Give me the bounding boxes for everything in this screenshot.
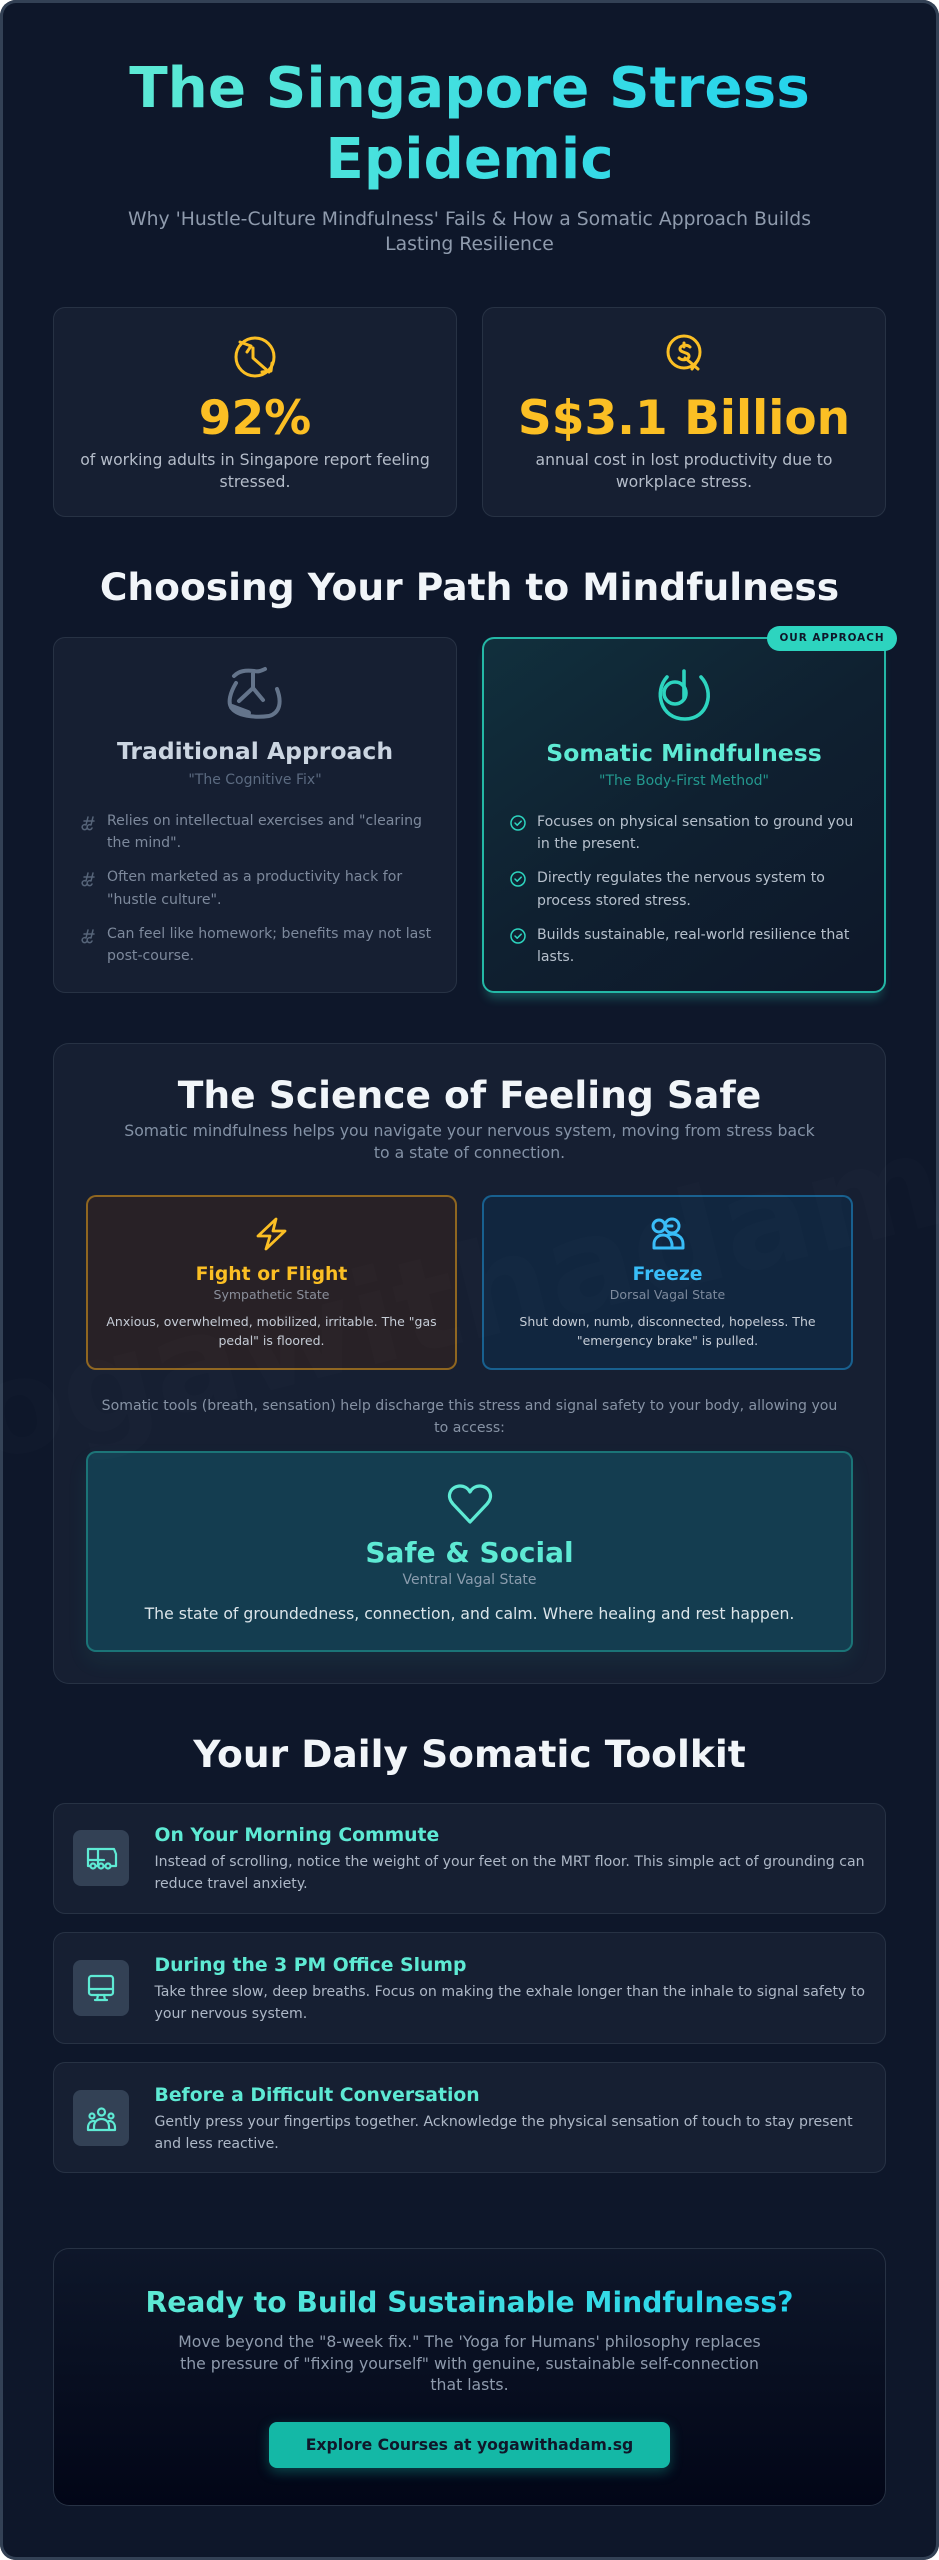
icon: train <box>73 1830 129 1886</box>
tagline: "The Body-First Method" <box>599 773 769 789</box>
stat description: annual cost in lost productivity due to <box>536 450 832 469</box>
list item: Often marketed as a productivity hack for <box>107 869 402 885</box>
transition text <box>102 1398 837 1436</box>
subtitle <box>128 209 811 255</box>
icon: lightning bolt <box>256 1218 286 1250</box>
panel: stat cost <box>482 307 886 517</box>
list item: "hustle culture". <box>107 892 221 908</box>
state description: pedal" is floored. <box>218 1332 324 1348</box>
stat description <box>536 450 832 491</box>
panel: morning commute <box>53 1802 886 1914</box>
list item <box>537 927 850 965</box>
card: safe and social <box>86 1451 853 1652</box>
stat description: stressed. <box>220 472 290 491</box>
title: The Singapore Stress <box>129 56 810 121</box>
list item <box>107 813 422 851</box>
panel: somatic mindfulness <box>482 637 886 993</box>
list item: post-course. <box>107 948 194 964</box>
body text: the pressure of "fixing yourself" with genuine, sustainable self-connection <box>180 2354 759 2373</box>
state name: Fight or Flight <box>196 1264 347 1284</box>
subtitle: Lasting Resilience <box>385 234 554 255</box>
panel: the science of feeling safe <box>53 1043 886 1684</box>
button <box>269 2422 670 2468</box>
list item: Can feel like homework; benefits may not last <box>107 926 431 942</box>
list item <box>107 926 431 964</box>
state type: Ventral Vagal State <box>402 1572 537 1588</box>
body text <box>178 2332 761 2394</box>
state name: Safe & Social <box>365 1536 574 1569</box>
transition text: to access: <box>434 1420 505 1436</box>
list: drawbacks <box>81 813 431 964</box>
state description: "emergency brake" is pulled. <box>577 1332 758 1348</box>
check icon <box>510 871 526 887</box>
list item <box>107 869 402 908</box>
icon: people <box>652 1218 684 1250</box>
badge: our approach <box>767 626 897 651</box>
check icon <box>510 928 526 944</box>
tip text: reduce travel anxiety. <box>154 1876 308 1892</box>
tip text: Instead of scrolling, notice the weight of your feet on the MRT floor. This simple act of grounding can <box>154 1854 865 1870</box>
subtitle: Why 'Hustle-Culture Mindfulness' Fails & How a Somatic Approach Builds <box>128 209 811 230</box>
state type: Dorsal Vagal State <box>610 1287 725 1302</box>
tagline: "The Cognitive Fix" <box>188 772 322 788</box>
tip text <box>154 1984 865 2022</box>
icon: centred figure <box>658 669 710 721</box>
list item: lasts. <box>537 949 574 965</box>
icon: heart <box>448 1484 492 1524</box>
stat description <box>80 450 430 491</box>
intro text: Somatic mindfulness helps you navigate your nervous system, moving from stress back <box>124 1121 815 1140</box>
stat number: S$3.1 Billion <box>518 391 850 446</box>
tip text: Gently press your fingertips together. Acknowledge the physical sensation of touch to stay present <box>154 2114 853 2130</box>
icon: meditating figure <box>228 666 282 719</box>
tip title: During the 3 PM Office Slump <box>154 1954 466 1976</box>
state name: Freeze <box>632 1264 703 1284</box>
list item: process stored stress. <box>537 893 691 909</box>
stat number: 92% <box>199 391 311 446</box>
tip text <box>154 2114 853 2152</box>
panel: call to action <box>53 2248 886 2506</box>
button: Explore Courses at yogawithadam.sg <box>306 2435 633 2454</box>
tip title: On Your Morning Commute <box>154 1825 439 1846</box>
icon: group <box>73 2090 129 2146</box>
title: Epidemic <box>325 127 614 192</box>
stat description: workplace stress. <box>616 472 752 491</box>
bullet icon <box>81 929 95 944</box>
bullet icon <box>81 872 95 886</box>
heading: choosing your path: Choosing Your Path to Mindfulness <box>100 565 839 609</box>
check icon <box>510 815 526 831</box>
state type: Sympathetic State <box>214 1287 329 1302</box>
title <box>119 53 820 195</box>
heading: daily toolkit: Your Daily Somatic Toolkit <box>193 1732 746 1776</box>
panel: office slump <box>53 1932 886 2044</box>
icon: stressed clock <box>234 336 276 378</box>
icon: monitor <box>73 1960 129 2016</box>
icon: dollar target <box>666 334 702 371</box>
badge: our approach: OUR APPROACH <box>779 632 885 644</box>
heading: Traditional Approach <box>117 737 393 765</box>
heading: Ready to Build Sustainable Mindfulness? <box>146 2286 793 2319</box>
panel: stat 92% <box>53 307 457 517</box>
list item: in the present. <box>537 836 640 852</box>
tip text: your nervous system. <box>154 2006 307 2022</box>
list: benefits <box>510 814 853 965</box>
list item <box>537 870 825 909</box>
intro text: to a state of connection. <box>374 1143 565 1162</box>
stat description: of working adults in Singapore report feeling <box>80 450 430 469</box>
list item: Directly regulates the nervous system to <box>537 870 825 886</box>
heading: Somatic Mindfulness <box>546 739 822 767</box>
state description: Anxious, overwhelmed, mobilized, irritable. The "gas <box>106 1314 437 1328</box>
tip text: and less reactive. <box>154 2136 279 2152</box>
heading: The Science of Feeling Safe <box>178 1073 761 1117</box>
state description: Shut down, numb, disconnected, hopeless. The <box>519 1314 816 1328</box>
transition text: Somatic tools (breath, sensation) help discharge this stress and signal safety to your body, allowing you <box>102 1398 837 1414</box>
list item: Builds sustainable, real-world resilience that <box>537 927 849 943</box>
panel: difficult conversation <box>53 2062 886 2173</box>
list item: Relies on intellectual exercises and "clearing <box>107 813 422 829</box>
body text: that lasts. <box>430 2375 509 2394</box>
state description <box>106 1314 437 1348</box>
state description <box>519 1314 816 1348</box>
card: fight or flight <box>86 1195 457 1370</box>
list item: the mind". <box>107 835 181 851</box>
tip text <box>154 1854 865 1892</box>
card: freeze <box>482 1195 853 1370</box>
bullet icon <box>81 816 95 830</box>
body text: Move beyond the "8-week fix." The 'Yoga for Humans' philosophy replaces <box>178 2332 761 2351</box>
intro text <box>124 1121 815 1162</box>
list item: Focuses on physical sensation to ground you <box>537 814 853 830</box>
tip title: Before a Difficult Conversation <box>154 2084 480 2106</box>
list item <box>537 814 853 852</box>
state description: The state of groundedness, connection, and calm. Where healing and rest happen. <box>145 1604 794 1623</box>
panel: traditional approach <box>53 637 457 993</box>
tip text: Take three slow, deep breaths. Focus on making the exhale longer than the inhale to signal safety to <box>154 1984 865 2000</box>
